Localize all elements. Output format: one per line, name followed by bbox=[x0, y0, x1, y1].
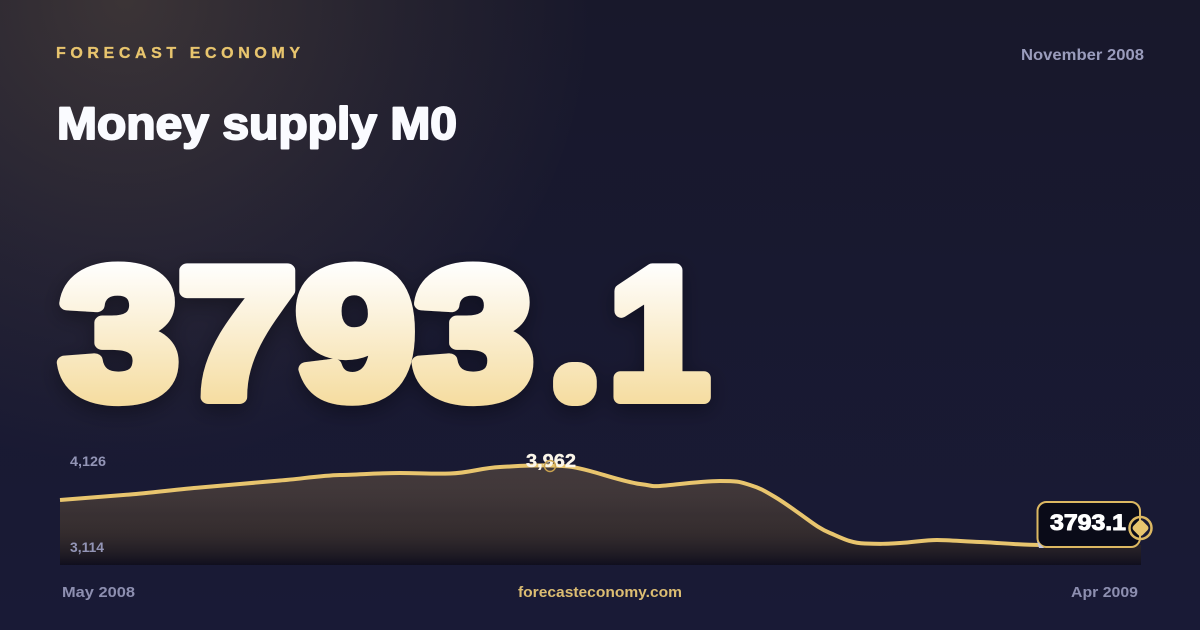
y-axis min label: 3,114 bbox=[70, 539, 104, 555]
title: Money supply M0 bbox=[57, 98, 457, 149]
y-axis max label: 4,126 bbox=[70, 453, 106, 469]
main value bbox=[60, 230, 709, 436]
value callout: 3793.1 bbox=[1050, 510, 1126, 535]
callout corner tick bbox=[1037, 541, 1044, 548]
date: November 2008 bbox=[1021, 47, 1144, 64]
chart area bbox=[60, 465, 1141, 565]
peak marker bbox=[544, 460, 556, 472]
end date: Apr 2009 bbox=[1071, 584, 1138, 601]
value callout bbox=[1038, 502, 1140, 547]
main value: 3793 bbox=[60, 230, 533, 436]
main value: . bbox=[569, 352, 581, 396]
end marker bbox=[1130, 517, 1152, 539]
website: forecasteconomy.com bbox=[518, 584, 682, 601]
peak label: 3,962 bbox=[526, 451, 576, 471]
chart line bbox=[60, 465, 1040, 545]
main value: 1 bbox=[609, 230, 709, 436]
start date: May 2008 bbox=[62, 584, 135, 601]
area chart bbox=[60, 451, 1152, 565]
brand label: FORECAST ECONOMY bbox=[56, 45, 300, 62]
